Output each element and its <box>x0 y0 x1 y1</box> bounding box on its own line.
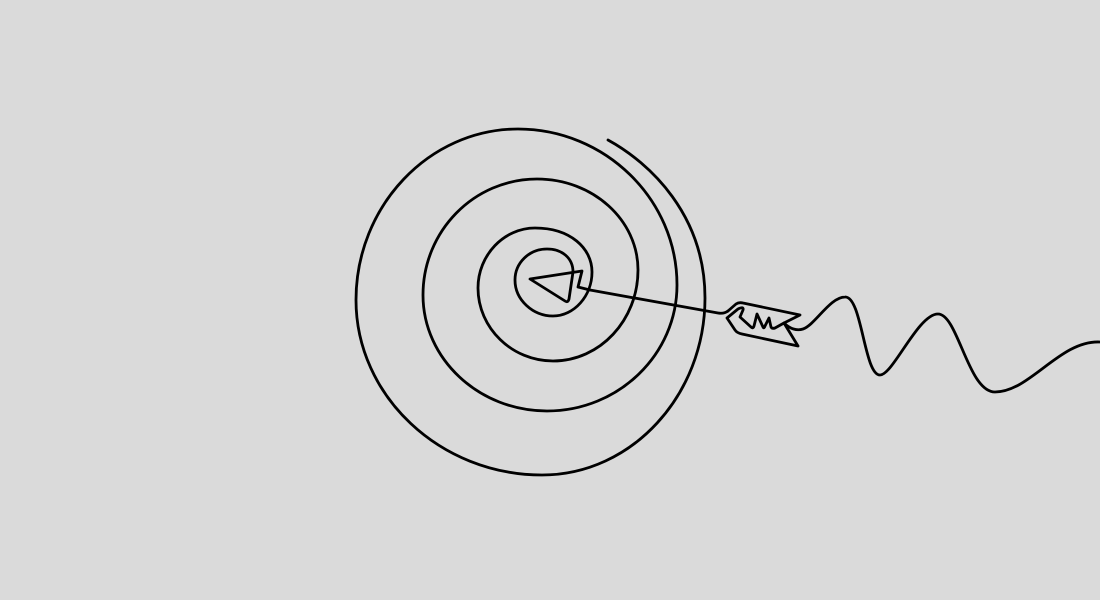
arrow head <box>530 271 590 302</box>
arrow shaft <box>590 290 728 313</box>
target rings <box>356 129 705 475</box>
arrow fletching <box>727 303 800 346</box>
target spiral with arrow, drawn as a continuous line <box>356 129 1100 475</box>
wavy tail line <box>784 297 1100 392</box>
